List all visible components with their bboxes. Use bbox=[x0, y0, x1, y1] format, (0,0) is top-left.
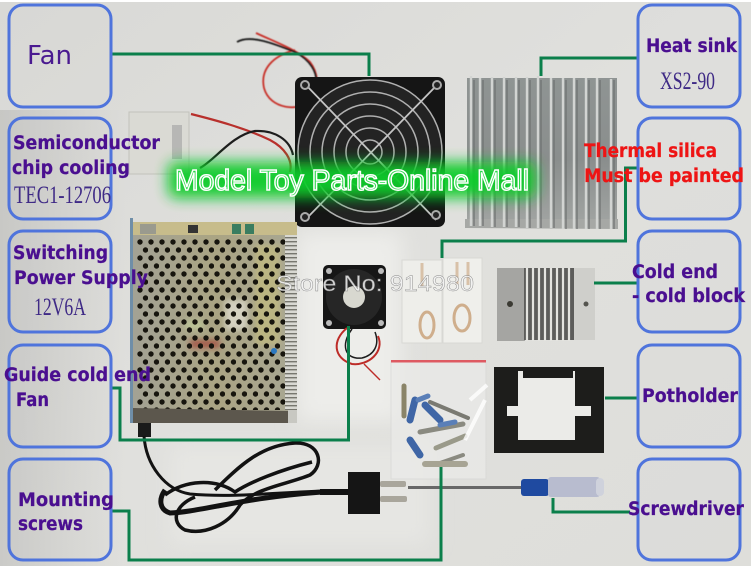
photo: small cold-end fan bbox=[323, 265, 386, 380]
label box: Switching Power Supply: Power Supply bbox=[14, 268, 148, 289]
label box: Cold end - cold block bbox=[632, 231, 746, 332]
photo: power cord and plug bbox=[144, 436, 380, 531]
label box: Mounting screws bbox=[9, 459, 114, 560]
label box: Guide cold end Fan bbox=[4, 345, 151, 447]
label box: Switching Power Supply: Switching bbox=[13, 243, 108, 264]
label box: Thermal silica: Thermal silica bbox=[584, 141, 717, 162]
label box: Mounting screws: screws bbox=[18, 514, 83, 535]
label box: Screwdriver: Screwdriver bbox=[628, 499, 745, 520]
label box: Screwdriver bbox=[628, 459, 745, 560]
photo: screwdriver bbox=[408, 477, 604, 497]
photo: heat sink bbox=[465, 76, 618, 229]
banner: store name with green glow: Model Toy Parts-Online Mall bbox=[175, 165, 529, 197]
label box: Switching Power Supply: 12V6A bbox=[34, 294, 86, 321]
watermark: Store No: 914980 bbox=[276, 271, 474, 296]
label box: Switching Power Supply bbox=[9, 231, 148, 332]
photo: potholder frame bbox=[494, 367, 604, 453]
label box: Guide cold end Fan: Guide cold end bbox=[4, 365, 151, 386]
label box: Heat sink bbox=[638, 5, 740, 107]
label box: Thermal silica: Must be painted bbox=[584, 166, 744, 187]
label box: Semiconductor chip cooling: chip cooling bbox=[12, 158, 130, 179]
photo: TEC chip bbox=[129, 112, 293, 174]
label box: Semiconductor chip cooling: TEC1-12706 bbox=[14, 182, 111, 209]
photo: thermal silica packets bbox=[402, 258, 482, 343]
label box: Fan bbox=[9, 5, 111, 107]
photo: cold block bbox=[497, 268, 595, 341]
connector lines bbox=[110, 54, 638, 560]
label box: Semiconductor chip cooling: Semiconductor bbox=[13, 133, 161, 154]
label box: Cold end - cold block: - cold block bbox=[632, 286, 746, 307]
photo: screw bag bbox=[391, 360, 487, 479]
label box: Guide cold end Fan: Fan bbox=[16, 390, 49, 411]
label box: Cold end - cold block: Cold end bbox=[632, 262, 718, 283]
label box: Mounting screws: Mounting bbox=[18, 490, 114, 511]
label box: Thermal silica bbox=[584, 118, 744, 219]
label box: Potholder: Potholder bbox=[642, 386, 739, 407]
label box: Heat sink: XS2-90 bbox=[660, 68, 715, 95]
photo: switching power supply bbox=[130, 218, 297, 437]
label box: Fan: Fan bbox=[27, 41, 72, 71]
label box: Potholder bbox=[638, 345, 740, 447]
photo: fan wires bbox=[237, 33, 317, 107]
label box: Semiconductor chip cooling bbox=[9, 118, 161, 219]
label box: Heat sink: Heat sink bbox=[646, 36, 738, 57]
photo: cooling fan bbox=[295, 77, 445, 227]
